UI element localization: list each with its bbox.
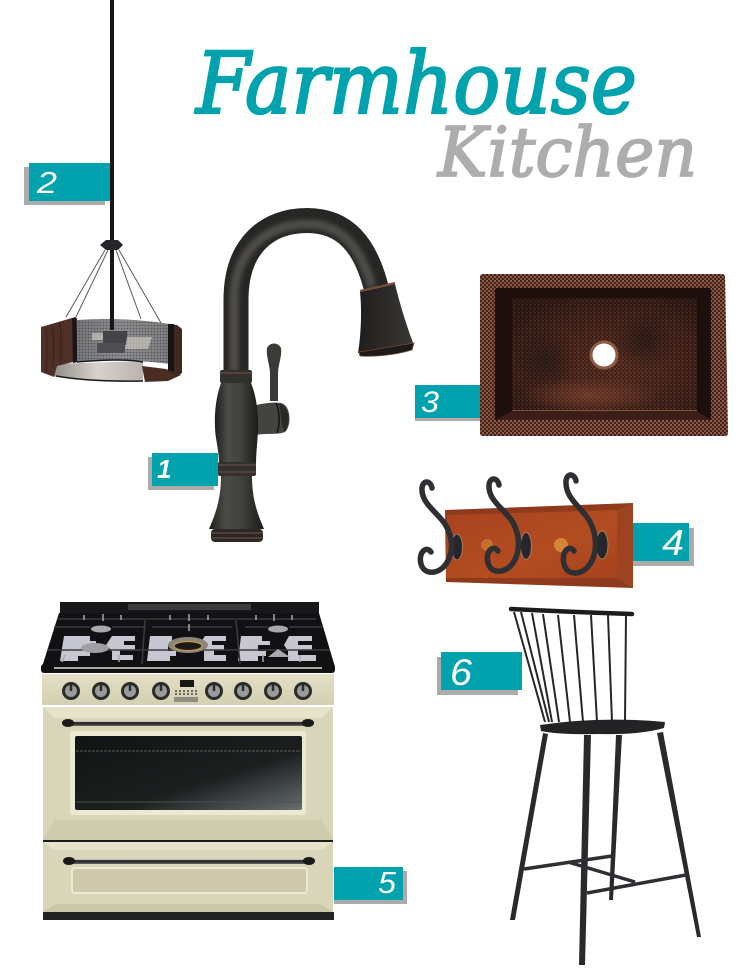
label 2: 2 [36, 165, 57, 200]
back rail [511, 609, 632, 614]
body [215, 383, 258, 464]
sink rim [480, 274, 728, 436]
gooseneck spout [234, 220, 376, 372]
range stove [41, 602, 335, 920]
hook rack [420, 475, 633, 588]
label 5: 5 [378, 865, 397, 900]
bar stool [510, 609, 701, 965]
backsplash [60, 602, 319, 614]
base [209, 476, 264, 529]
copper sink [480, 274, 728, 436]
grate bars [48, 619, 330, 664]
rungs [524, 856, 686, 893]
cooktop [42, 613, 335, 667]
grate prongs [62, 614, 300, 662]
pendant light [41, 0, 182, 382]
title: Kitchen: Kitchen [436, 114, 697, 193]
storage drawer [43, 842, 333, 912]
label 3: 3 [421, 386, 439, 419]
legs [510, 732, 701, 965]
hook 2 [487, 479, 532, 571]
label 1: 1 [157, 454, 171, 484]
spindles [514, 612, 626, 722]
label 3 [415, 385, 480, 421]
label 4: 4 [662, 522, 684, 563]
hook 1 [420, 482, 462, 572]
label 4 [633, 522, 694, 566]
hook 3 [563, 475, 608, 573]
burners [81, 626, 290, 657]
clock display [180, 680, 194, 687]
oven window [75, 736, 302, 810]
seat [540, 720, 665, 734]
plinth [43, 912, 334, 920]
spray head [358, 284, 414, 353]
drawer handle [69, 859, 309, 864]
title: Farmhouse: Farmhouse [194, 35, 637, 134]
knobs [64, 684, 310, 698]
lever handle [267, 344, 281, 401]
faucet [209, 220, 414, 542]
sink basin [495, 288, 711, 420]
oven door [43, 707, 333, 840]
front rail [41, 664, 335, 673]
wood board [445, 503, 633, 588]
wooden knobs [481, 539, 493, 551]
label 2 [24, 163, 110, 205]
label 1 [148, 453, 218, 490]
burner plates [60, 636, 316, 661]
oven handle [68, 721, 308, 726]
control panel [42, 674, 334, 705]
drain hole [590, 340, 618, 370]
label 6: 6 [450, 652, 472, 693]
label 5 [334, 865, 407, 904]
label 6 [437, 652, 522, 695]
